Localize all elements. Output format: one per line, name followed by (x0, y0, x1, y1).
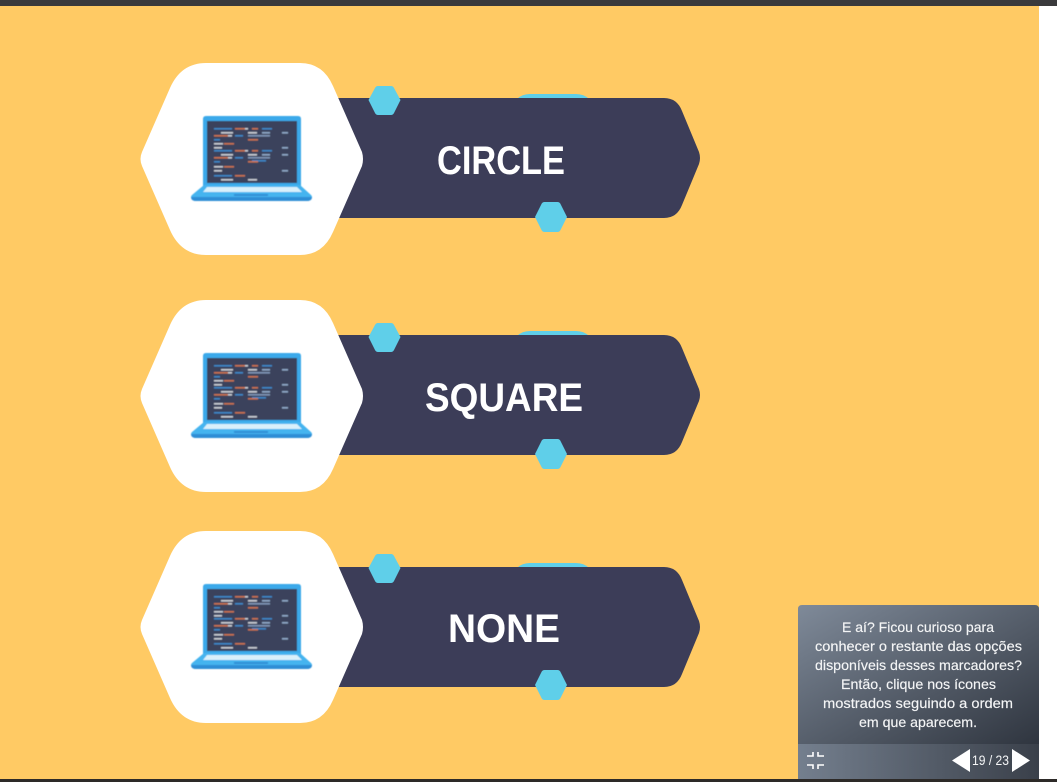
label: NONE (448, 607, 560, 651)
white hexagon (140, 300, 363, 492)
icon: next arrow (1012, 749, 1030, 772)
panel: CIRCLE (140, 63, 700, 255)
icon: laptop (191, 584, 312, 669)
panel: NONE (140, 531, 700, 723)
blue hexagon behind bar (517, 94, 589, 99)
white hexagon (140, 63, 363, 255)
bar (320, 567, 700, 687)
caption text: mostrados seguindo a ordem (823, 695, 1013, 711)
white hexagon (140, 531, 363, 723)
small hexagon bottom (535, 439, 567, 469)
blue hexagon behind bar (517, 563, 589, 568)
panel: SQUARE (140, 300, 700, 492)
caption text: conhecer o restante das opções (815, 638, 1022, 654)
caption text: E aí? Ficou curioso para (842, 619, 994, 635)
small hexagon bottom (535, 202, 567, 232)
icon: laptop (191, 116, 312, 201)
page counter: 19 / 23 (972, 752, 1009, 768)
label: CIRCLE (437, 139, 565, 183)
bar (320, 335, 700, 455)
small hexagon top (368, 554, 400, 583)
label: SQUARE (425, 376, 583, 420)
small hexagon bottom (535, 670, 567, 700)
bottom bar (0, 779, 1057, 782)
caption text: em que aparecem. (859, 714, 977, 730)
caption text (815, 619, 1022, 730)
bar (320, 98, 700, 218)
blue hexagon behind bar (517, 331, 589, 336)
caption panel (798, 605, 1039, 779)
caption text: disponíveis desses marcadores? (815, 657, 1022, 673)
caption background (798, 605, 1039, 744)
small hexagon top (368, 323, 400, 352)
top bar (0, 0, 1057, 6)
caption text: Então, clique nos ícones (841, 676, 996, 692)
small hexagon top (368, 86, 400, 115)
icon: laptop (191, 353, 312, 438)
icon: exit fullscreen (807, 752, 824, 769)
caption footer (798, 744, 1039, 779)
icon: previous arrow (952, 749, 970, 772)
